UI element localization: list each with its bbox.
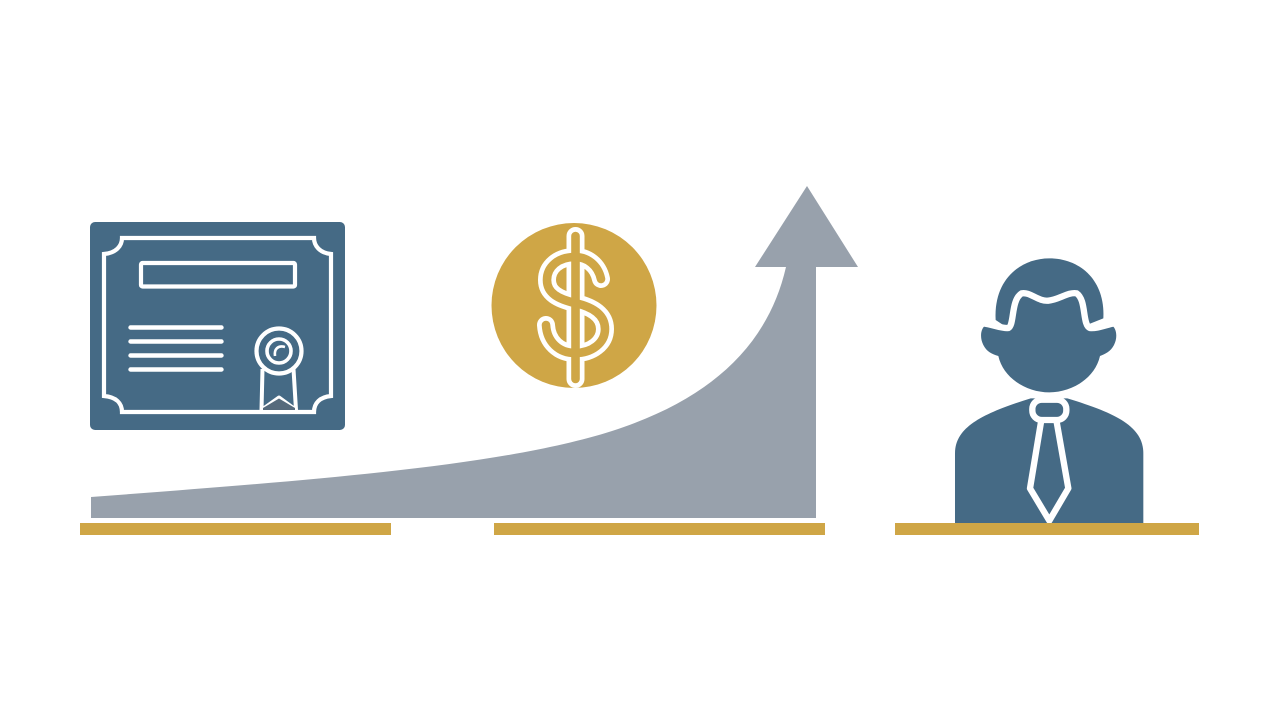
collar — [1032, 400, 1066, 420]
arrow: rising growth curve — [91, 186, 858, 518]
hair — [996, 258, 1103, 328]
icon: dollar coin — [492, 223, 656, 388]
icon: businessman — [955, 258, 1143, 524]
certificate border — [104, 238, 331, 412]
necktie — [1030, 422, 1068, 521]
gold baseline: right — [895, 523, 1199, 535]
gold baseline: center — [494, 523, 825, 535]
icon: certificate — [90, 222, 345, 430]
hairline — [983, 293, 1114, 328]
suit torso — [955, 398, 1143, 524]
dollar sign outline — [546, 236, 605, 379]
certificate title box — [141, 263, 295, 286]
certificate seal and ribbon — [256, 328, 302, 410]
certificate text lines — [130, 328, 222, 370]
gold baseline: left — [80, 523, 391, 535]
face and ears — [981, 293, 1116, 392]
